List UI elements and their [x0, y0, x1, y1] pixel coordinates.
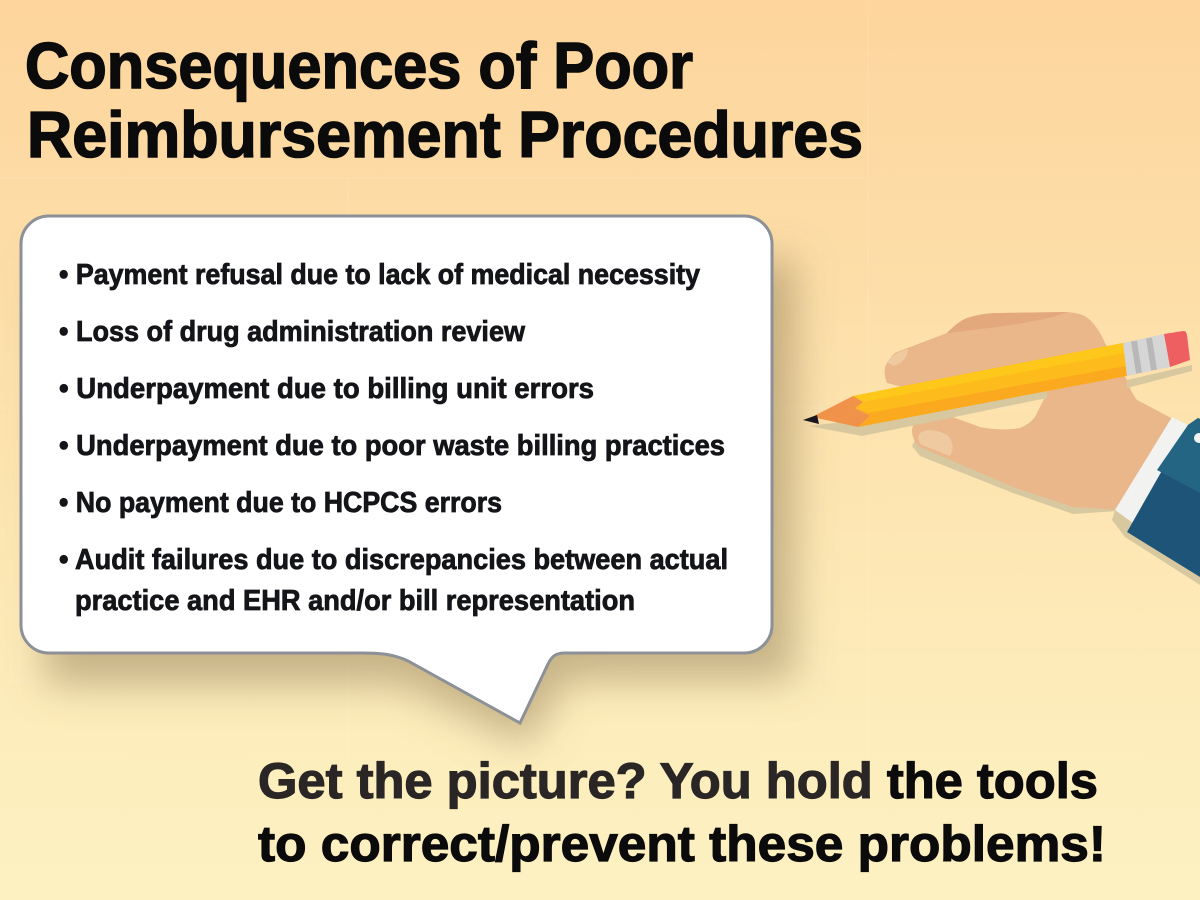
- call to action: Get the picture? You hold the tools: [258, 753, 1098, 809]
- hand: [885, 312, 1175, 510]
- pencil ferrule: [1123, 334, 1170, 376]
- pencil shadow: [808, 365, 1192, 436]
- ferrule ridges: [1134, 338, 1154, 373]
- pencil lead: [803, 415, 819, 424]
- list of consequences: • Underpayment due to poor waste billing practices: [59, 430, 725, 462]
- pencil wood tip: [812, 396, 870, 427]
- pencil highlight: [853, 343, 1126, 413]
- pencil body: [853, 343, 1127, 427]
- shirt cuff: [1115, 417, 1188, 523]
- call to action: to correct/prevent these problems!: [258, 816, 1106, 872]
- pencil eraser: [1164, 331, 1190, 367]
- sleeve highlight: [1157, 418, 1200, 493]
- title: [25, 29, 863, 171]
- title: Consequences of Poor: [25, 29, 693, 102]
- jacket sleeve: [1127, 418, 1200, 577]
- pencil top facet: [853, 343, 1124, 402]
- illustration: hand holding pencil: [803, 312, 1200, 585]
- hand shadow: [912, 440, 1118, 514]
- list of consequences: • Loss of drug administration review: [59, 316, 525, 348]
- finger shading: [947, 312, 1067, 333]
- list of consequences: [59, 259, 728, 617]
- bubble shape: [21, 216, 772, 723]
- sleeve button: [1194, 433, 1200, 443]
- call to action: [258, 753, 1106, 872]
- list of consequences: • No payment due to HCPCS errors: [59, 487, 502, 519]
- fingertip nails: [887, 349, 953, 456]
- title: Reimbursement Procedures: [27, 98, 863, 171]
- cuff shadow: [1112, 510, 1200, 585]
- bubble shadow: [45, 260, 795, 745]
- panel: speech bubble: [21, 216, 795, 745]
- list of consequences: • Payment refusal due to lack of medical necessity: [59, 259, 700, 291]
- list of consequences: practice and EHR and/or bill representation: [75, 585, 635, 617]
- list of consequences: • Underpayment due to billing unit errors: [59, 373, 594, 405]
- list of consequences: • Audit failures due to discrepancies between actual: [59, 544, 728, 576]
